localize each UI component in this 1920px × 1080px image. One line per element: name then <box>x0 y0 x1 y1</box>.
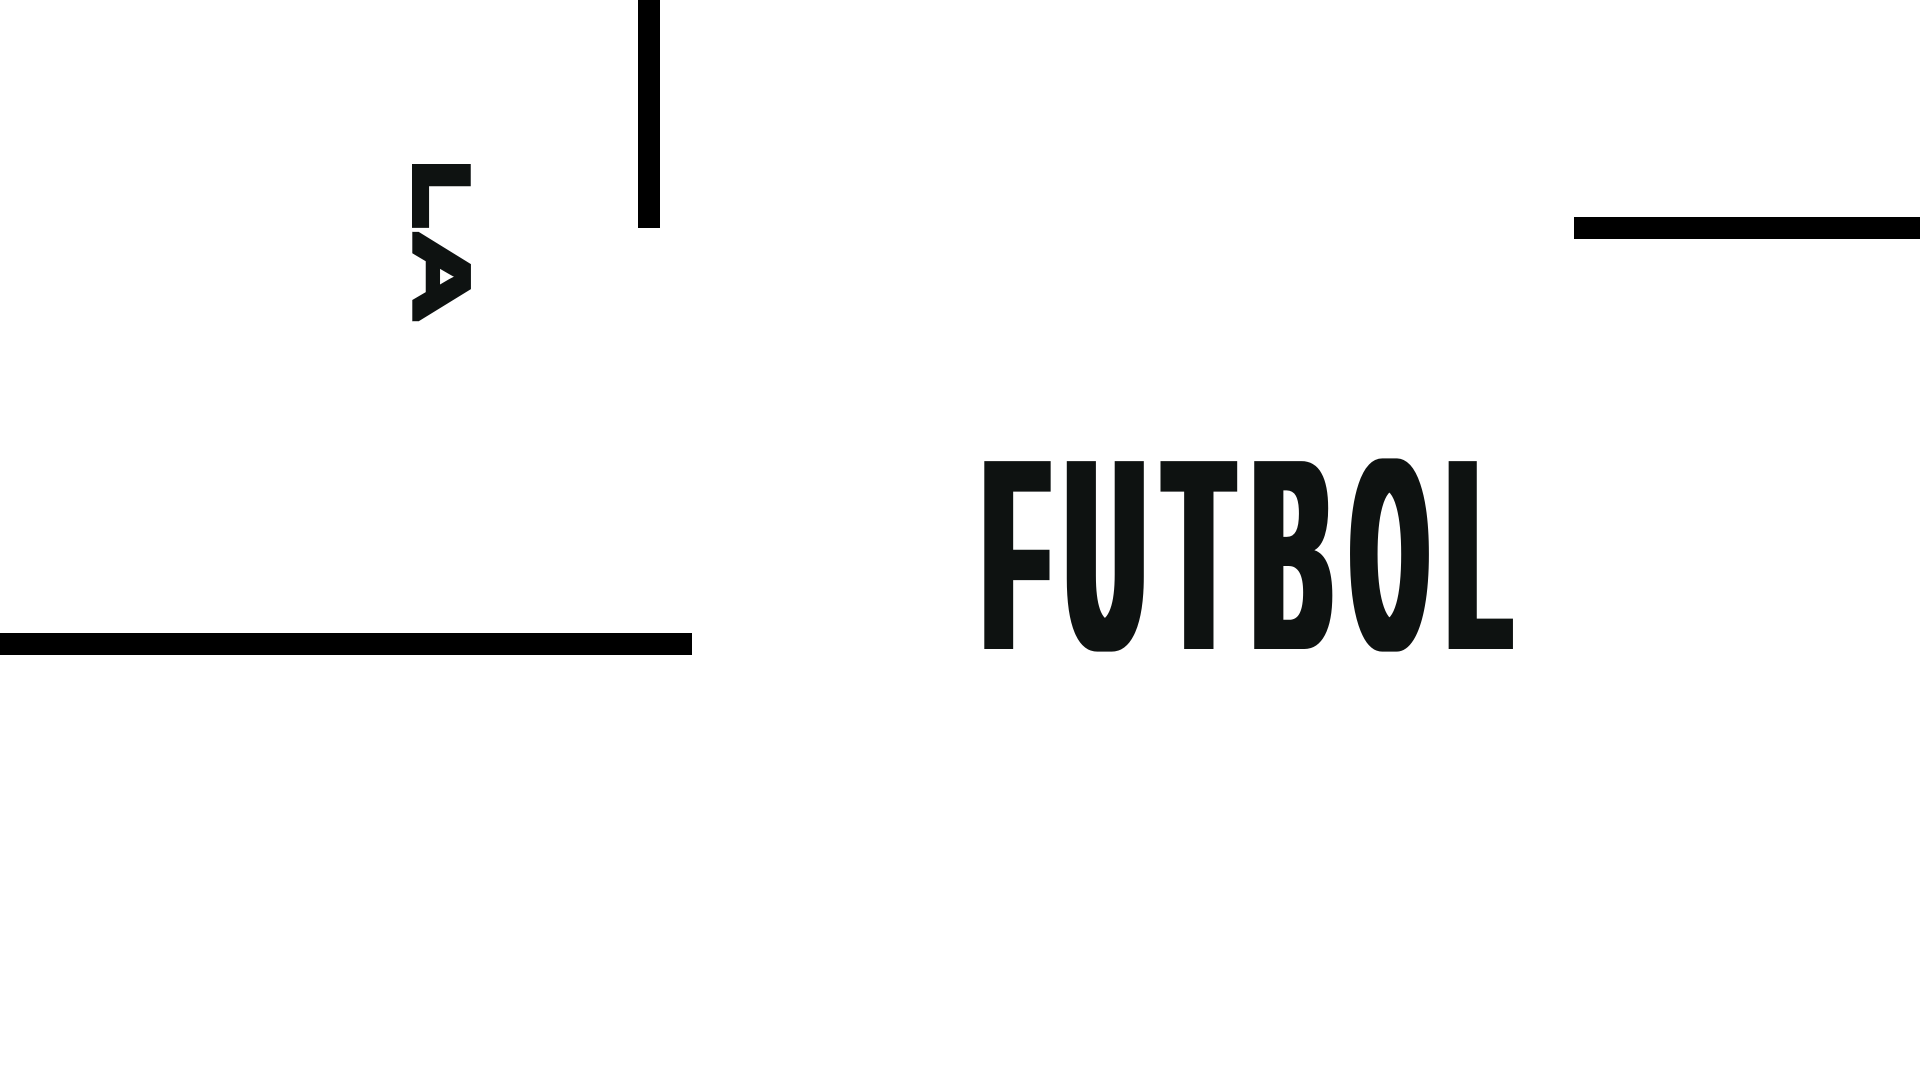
title: FUTBOL: U <box>1068 402 1143 707</box>
rotated word: LA: L <box>401 159 482 228</box>
vertical top bar <box>638 0 660 228</box>
left horizontal bar <box>0 633 692 655</box>
rotated word: LA <box>399 159 484 323</box>
title: FUTBOL: F <box>984 402 1047 707</box>
title: FUTBOL: T <box>1166 401 1231 707</box>
rotated word: LA: A <box>399 230 484 323</box>
title: FUTBOL <box>984 401 1509 708</box>
right horizontal bar <box>1574 217 1920 239</box>
title: FUTBOL: O <box>1353 403 1426 708</box>
title: FUTBOL: B <box>1254 402 1330 707</box>
title: FUTBOL: L <box>1449 403 1509 708</box>
